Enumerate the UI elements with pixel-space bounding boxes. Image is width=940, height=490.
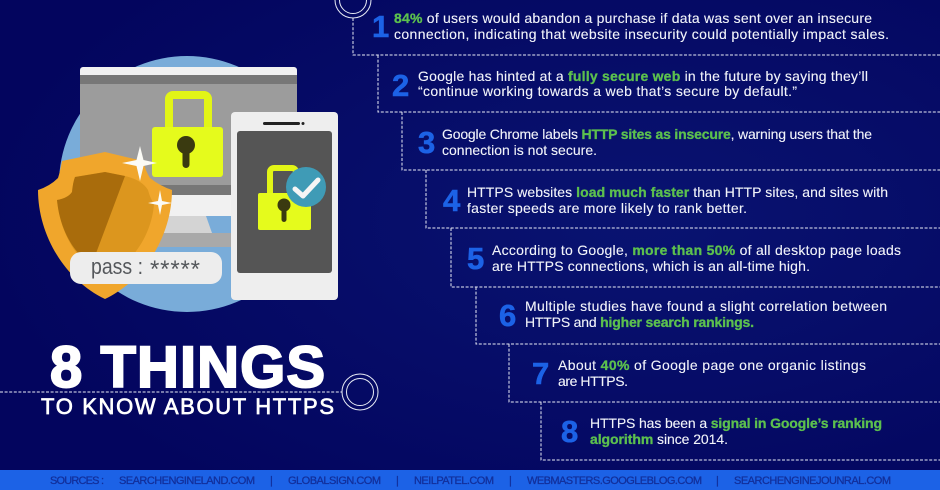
number 6: 6 bbox=[499, 298, 516, 333]
ring: top bbox=[335, 0, 371, 18]
item 4 text bbox=[467, 184, 888, 216]
footer: sources: | bbox=[509, 475, 512, 487]
item 3 text: connection is not secure. bbox=[442, 142, 597, 158]
item 6 text bbox=[525, 298, 887, 330]
icon: shield bbox=[38, 152, 172, 299]
ring: title bbox=[342, 374, 378, 410]
icon: sparkle small bbox=[148, 190, 172, 215]
footer: sources: | bbox=[270, 475, 273, 487]
item 4 text: HTTPS websites load much faster than HTTP sites, and sites with bbox=[467, 184, 888, 200]
item 1 text: connection, indicating that website insecurity could potentially impact sales. bbox=[394, 26, 889, 42]
desktop monitor bbox=[80, 67, 297, 247]
item 8 bbox=[561, 414, 882, 449]
item 5 text: According to Google, more than 50% of all desktop page loads bbox=[492, 242, 901, 258]
item 1 bbox=[372, 9, 889, 44]
password field: pass : bbox=[91, 254, 143, 279]
item 7 text: are HTTPS. bbox=[558, 373, 628, 389]
footer: sources: GLOBALSIGN.COM bbox=[288, 475, 381, 487]
footer: sources bbox=[0, 470, 940, 490]
item 6 text: HTTPS and higher search rankings. bbox=[525, 314, 754, 330]
item 6 bbox=[499, 298, 887, 333]
item 7 text bbox=[558, 357, 866, 389]
footer: sources: SEARCHENGINELAND.COM bbox=[119, 475, 255, 487]
item 2 text: “continue working towards a web that’s secure by default.” bbox=[418, 83, 797, 99]
item 7 text: About 40% of Google page one organic listings bbox=[558, 357, 866, 373]
item 2 text bbox=[418, 68, 868, 99]
footer: sources: SEARCHENGINEJOUNRAL.COM bbox=[734, 475, 891, 487]
item 8 text: algorithm since 2014. bbox=[590, 431, 728, 447]
footer: sources: | bbox=[396, 475, 399, 487]
item 1 text: 84% of users would abandon a purchase if data was sent over an insecure bbox=[394, 10, 872, 26]
item 3 text: Google Chrome labels HTTP sites as insecure, warning users that the bbox=[442, 126, 872, 142]
subheading: to know about https: TO KNOW ABOUT HTTPS bbox=[41, 394, 334, 419]
password field: ***** bbox=[150, 256, 200, 283]
number 5: 5 bbox=[467, 241, 484, 276]
item 1 text bbox=[394, 10, 889, 42]
item 2 bbox=[392, 68, 868, 103]
password field bbox=[70, 252, 222, 284]
footer: sources: SOURCES : bbox=[50, 475, 104, 487]
number 1: 1 bbox=[372, 9, 389, 44]
number 2: 2 bbox=[392, 68, 409, 103]
item 6 text: Multiple studies have found a slight correlation between bbox=[525, 298, 887, 314]
background circle bbox=[59, 56, 315, 312]
number 3: 3 bbox=[418, 125, 435, 160]
heading: 8 things: 8 THINGS bbox=[50, 335, 325, 400]
item 2 text: Google has hinted at a fully secure web in the future by saying they’ll bbox=[418, 68, 868, 84]
item 5 bbox=[467, 241, 901, 276]
item 4 text: faster speeds are more likely to rank better. bbox=[467, 200, 747, 216]
title bbox=[41, 335, 334, 419]
icon: check badge bbox=[286, 167, 326, 207]
item 5 text: are HTTPS connections, which is an all-time high. bbox=[492, 258, 810, 274]
icon: phone padlock bbox=[258, 168, 311, 230]
number 8: 8 bbox=[561, 414, 578, 449]
item 3 bbox=[418, 125, 872, 160]
item 8 text: HTTPS has been a signal in Google’s ranking bbox=[590, 415, 882, 431]
footer: sources: WEBMASTERS.GOOGLEBLOG.COM bbox=[527, 475, 702, 487]
item 7 bbox=[532, 356, 866, 391]
footer: sources: NEILPATEL.COM bbox=[414, 475, 494, 487]
dashed connector: title bbox=[0, 391, 342, 393]
illustration: security devices bbox=[38, 56, 338, 312]
icon: sparkle large bbox=[122, 146, 157, 181]
footer: sources: | bbox=[716, 475, 719, 487]
icon: monitor padlock bbox=[152, 95, 223, 177]
step connectors bbox=[353, 18, 940, 460]
item 4 bbox=[443, 183, 888, 218]
number 4: 4 bbox=[443, 183, 461, 218]
item 8 text bbox=[590, 415, 882, 447]
item 3 text bbox=[442, 126, 872, 158]
number 7: 7 bbox=[532, 356, 549, 391]
mobile phone bbox=[231, 112, 338, 300]
item 5 text bbox=[492, 242, 901, 274]
